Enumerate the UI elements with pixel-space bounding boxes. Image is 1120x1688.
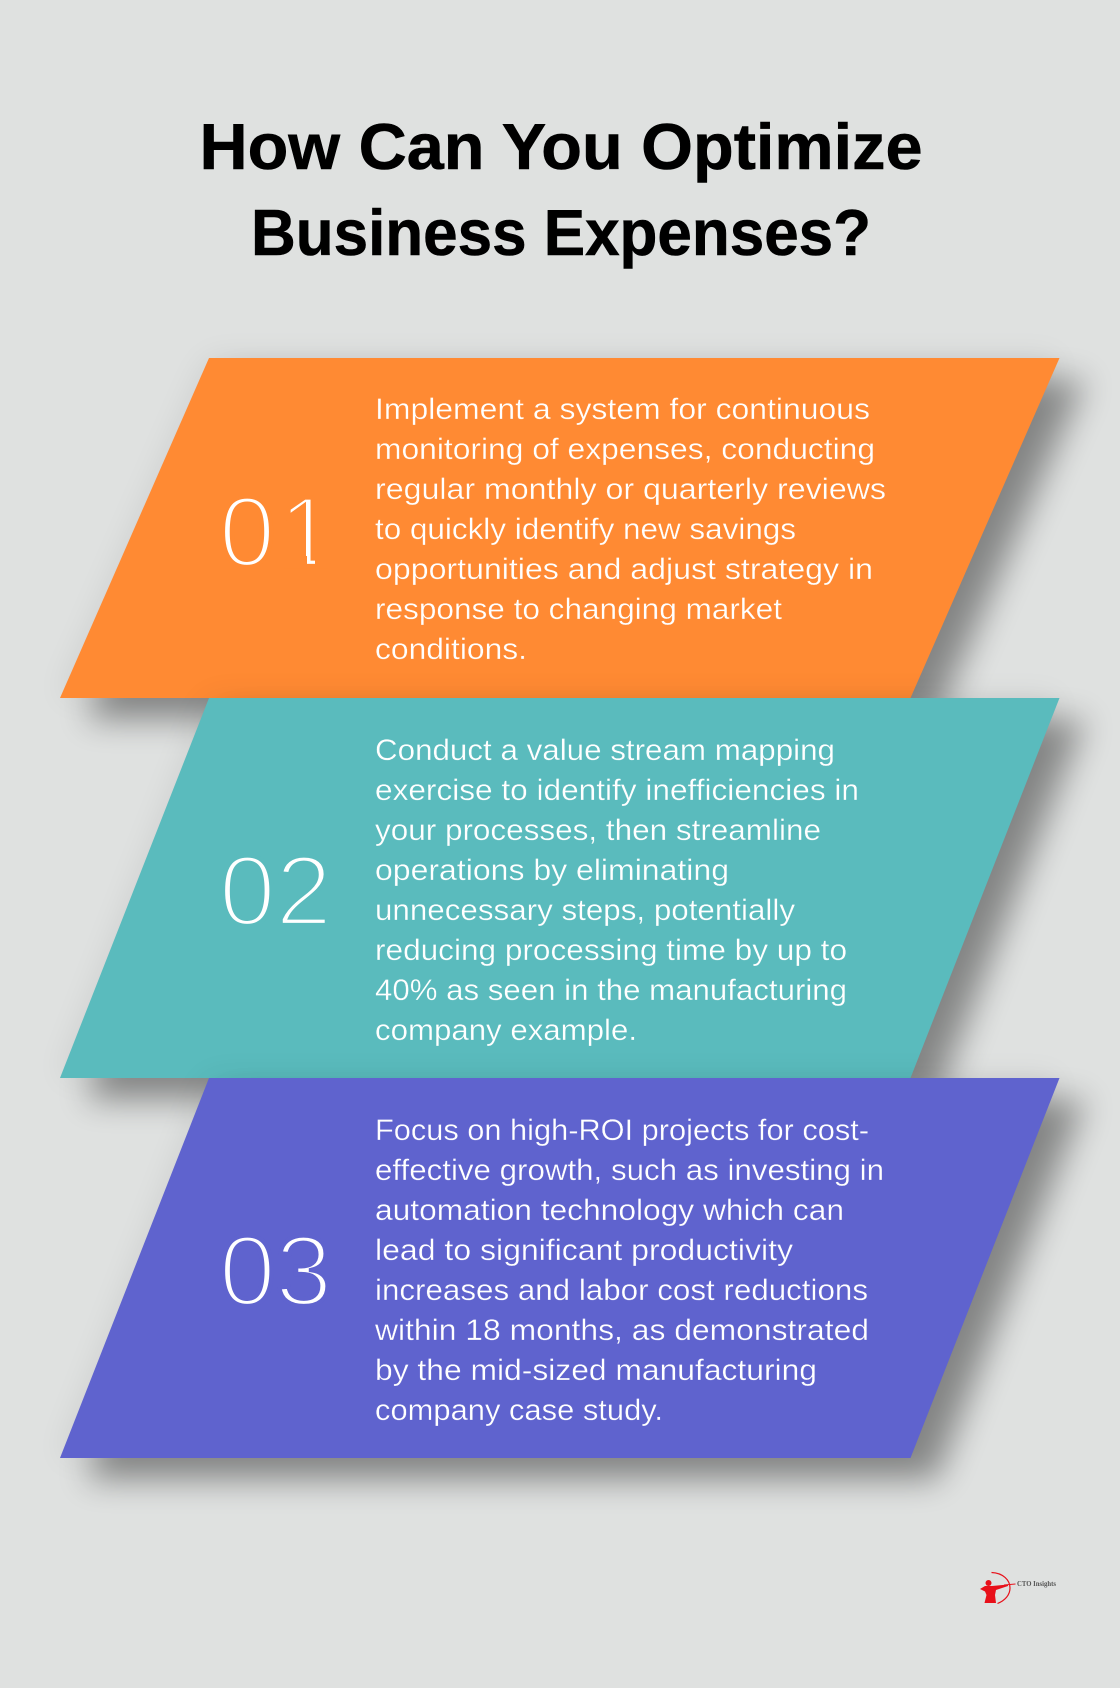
- text block: step 01: response to changing market: [375, 593, 782, 626]
- text block: step 03: [374, 1114, 884, 1427]
- text block: step 02: operations by eliminating: [375, 854, 729, 887]
- logo: CTO Insights: [980, 1572, 1056, 1604]
- text block: step 03: increases and labor cost reductions: [375, 1274, 868, 1307]
- text block: step 03: within 18 months, as demonstrated: [374, 1314, 869, 1347]
- text block: step 03: automation technology which can: [375, 1194, 844, 1227]
- title: [200, 110, 922, 269]
- text block: step 03: Focus on high-ROI projects for cost-: [375, 1114, 869, 1147]
- text block: step 01: monitoring of expenses, conducting: [375, 433, 875, 466]
- text block: step 01: to quickly identify new savings: [375, 513, 796, 546]
- text block: step 02: [375, 734, 859, 1047]
- logo wordmark: CTO Insights: [1017, 1579, 1056, 1588]
- teal parallelogram: [60, 698, 1060, 1078]
- text block: step 01: opportunities and adjust strategy in: [375, 553, 873, 586]
- icon: red archer: [980, 1572, 1016, 1604]
- text block: step 03: by the mid-sized manufacturing: [375, 1354, 817, 1387]
- text block: step 02: 40% as seen in the manufacturing: [375, 974, 847, 1007]
- text block: step 03: effective growth, such as investing in: [375, 1154, 884, 1187]
- text block: step 03: lead to significant productivity: [375, 1234, 793, 1267]
- title: Business Expenses?: [251, 196, 871, 269]
- number 03: 03: [219, 1215, 332, 1326]
- number 02: 02: [219, 835, 332, 946]
- text block: step 02: Conduct a value stream mapping: [375, 734, 835, 767]
- text block: step 02: unnecessary steps, potentially: [375, 894, 795, 927]
- number 01: 1: [279, 476, 334, 587]
- number 01: [225, 498, 315, 565]
- panel: step 03: [60, 1078, 1086, 1480]
- text block: step 01: conditions.: [375, 633, 527, 666]
- text block: step 02: your processes, then streamline: [375, 814, 821, 847]
- panel: step 02: [60, 698, 1086, 1100]
- indigo parallelogram: [60, 1078, 1060, 1458]
- text block: step 02: company example.: [375, 1014, 637, 1047]
- text block: step 03: company case study.: [375, 1394, 663, 1427]
- orange parallelogram: [60, 358, 1060, 698]
- number 01: 0: [219, 476, 275, 587]
- text block: step 02: exercise to identify inefficiencies in: [375, 774, 859, 807]
- text block: step 02: reducing processing time by up to: [375, 934, 847, 967]
- title: How Can You Optimize: [200, 110, 922, 183]
- text block: step 01: regular monthly or quarterly reviews: [375, 473, 886, 506]
- panel: step 01: [60, 358, 1086, 720]
- text block: step 01: Implement a system for continuous: [375, 393, 870, 426]
- text block: step 01: [375, 393, 886, 666]
